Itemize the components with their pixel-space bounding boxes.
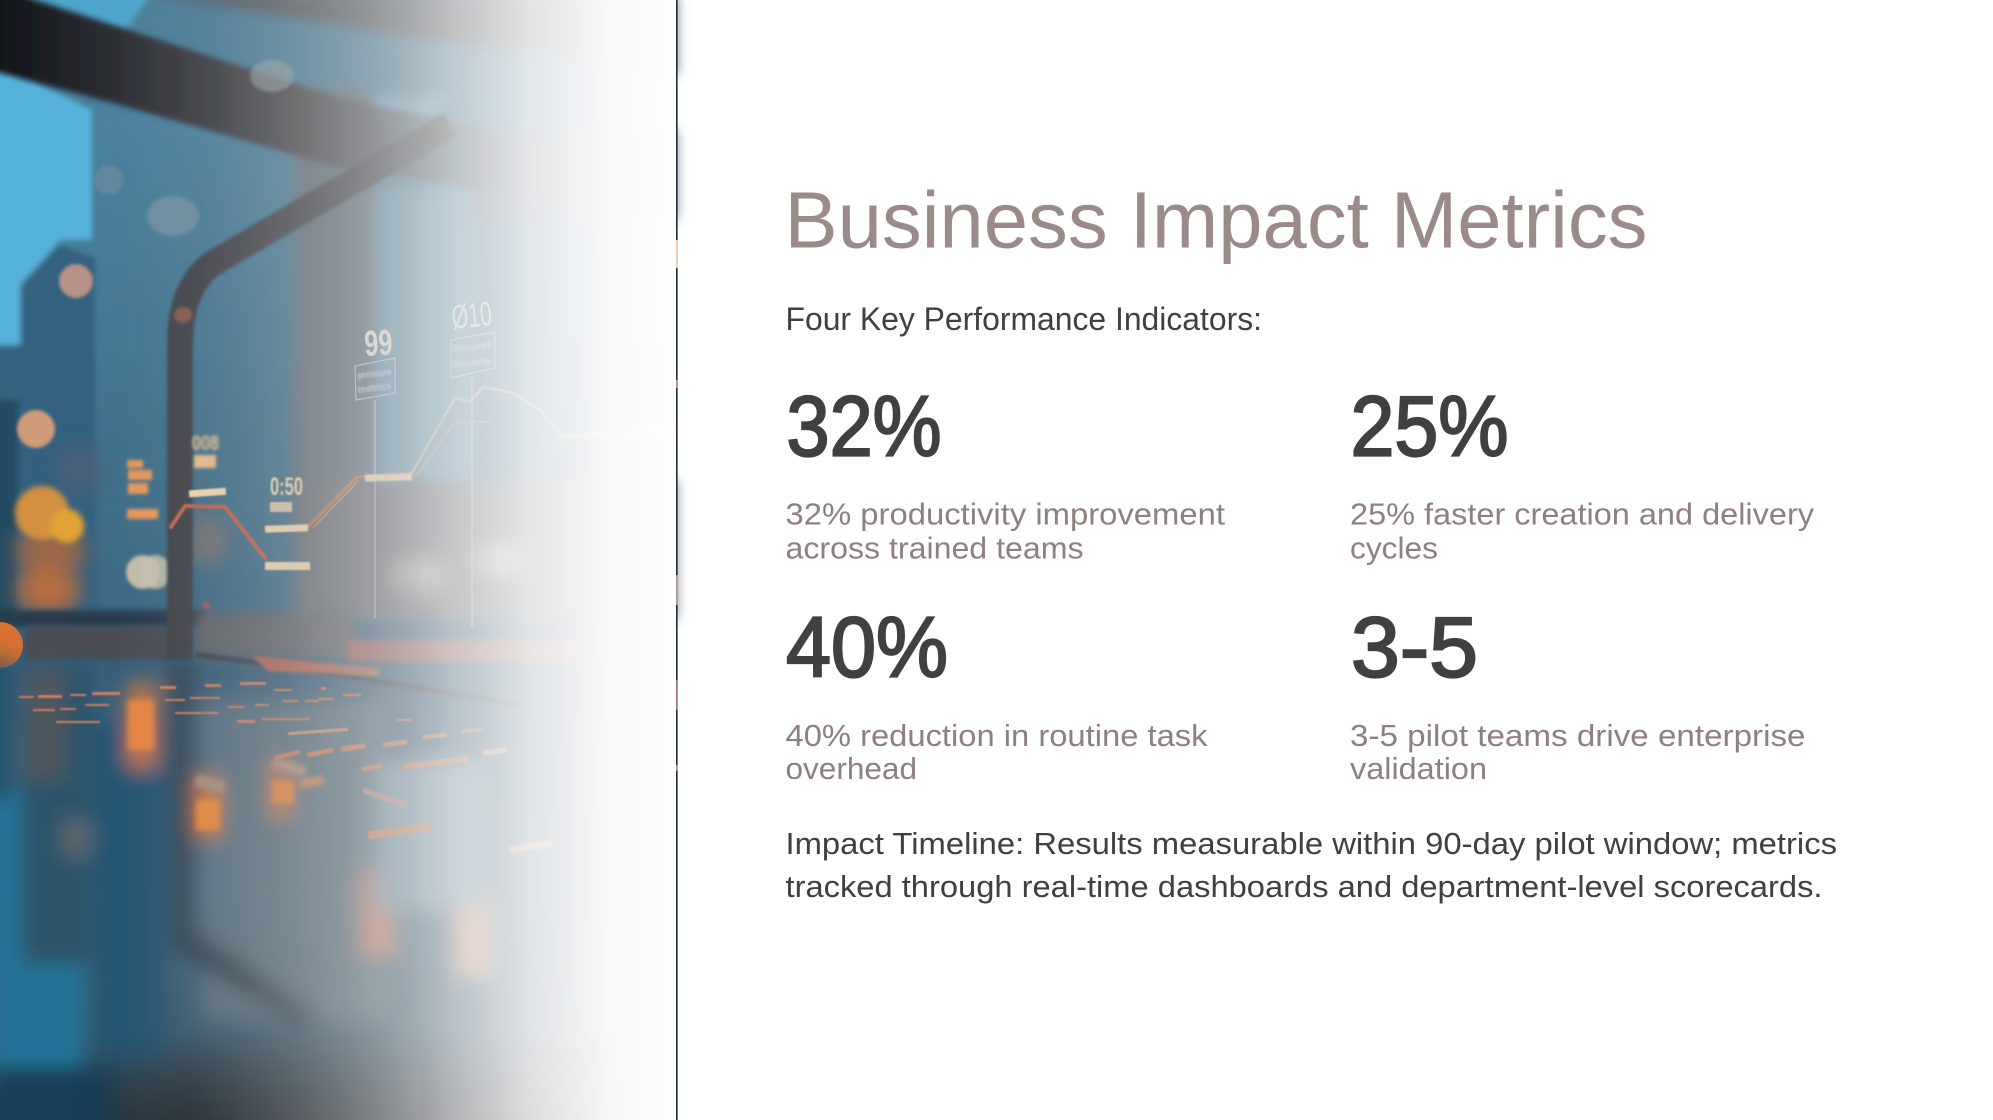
metric: 25% faster delivery: cycles [1350,530,1438,566]
subtitle: Four Key Performance Indicators: [786,301,1262,337]
horizon and orange dot [0,610,588,705]
white fade overlay [0,0,676,1120]
metric: 25% faster delivery [1350,380,1815,566]
metric: 40% task overhead: 40% reduction in routine task [786,718,1208,753]
vertical divider line [676,0,678,1120]
metric: 32% productivity: 32% [786,380,942,474]
impact timeline paragraph: tracked through real-time dashboards and department-level scorecards. [786,869,1822,904]
chart data callouts: imoorts [452,356,491,371]
metric: 25% faster delivery: 25% faster creation and delivery [1350,496,1815,532]
bokeh lights [14,60,526,616]
laptop frame [174,125,450,660]
chart value labels [192,295,494,501]
chart data callouts: metrics [357,381,393,396]
metric: 3-5 pilot teams [1350,600,1806,786]
dark roof beam [0,0,676,195]
desk reflections [0,646,498,1120]
line chart on laptop screen [127,387,676,570]
reflected screen blocks [128,700,325,830]
metric: 3-5 pilot teams: 3-5 pilot teams drive enterprise [1350,718,1806,753]
metric: 25% faster delivery: 25% [1350,380,1508,474]
metric: 32% productivity [786,380,1225,566]
impact timeline paragraph: Impact Timeline: Results measurable within 90-day pilot window; metrics [786,826,1837,861]
chart value labels: 008 [192,432,219,455]
keyboard key reflections [19,682,552,853]
metric: 40% task overhead: overhead [786,751,917,786]
muted tone wash [0,0,420,1120]
metric: 32% productivity: 32% productivity improvement [786,496,1225,532]
chart value labels: 0:50 [270,473,303,501]
metric: 32% productivity: across trained teams [786,530,1084,566]
chart value labels: Ø10 [450,295,494,337]
impact timeline paragraph [786,826,1837,904]
title: Business Impact Metrics [784,176,1648,264]
metric: 3-5 pilot teams: validation [1350,751,1487,786]
city and sky backdrop [0,0,676,620]
metric: 3-5 pilot teams: 3-5 [1351,600,1478,696]
chart data callouts: pressure [357,367,392,382]
chart value labels: 99 [363,322,393,364]
metric: 40% task overhead [786,600,1208,786]
photo panel: blurred laptop dashboard fading to white [0,0,676,1120]
metric: 40% task overhead: 40% [786,600,948,696]
chart data callouts [355,332,495,628]
chart data callouts: thuoport [452,340,491,355]
